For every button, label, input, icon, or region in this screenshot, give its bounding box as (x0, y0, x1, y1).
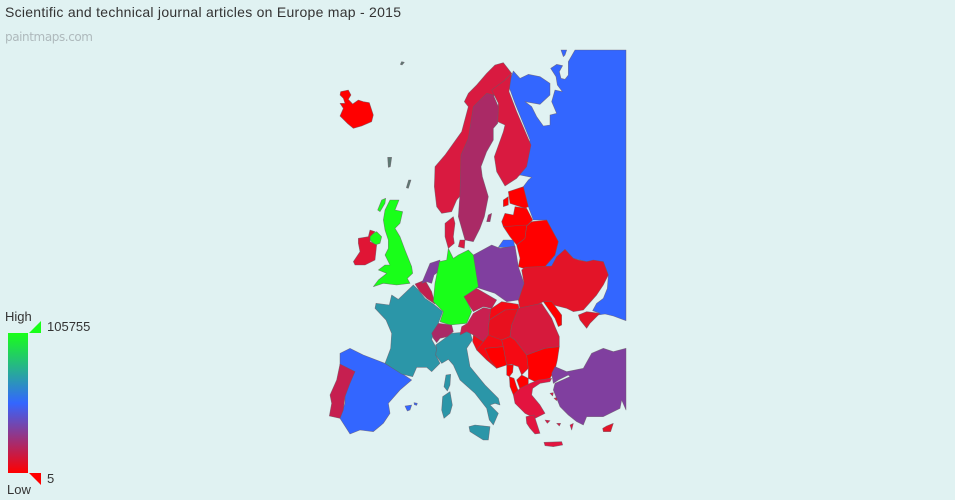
title: Scientific and technical journal articles on Europe map - 2015 (5, 4, 401, 20)
Poland (473, 245, 524, 302)
watermark: paintmaps.com: paintmaps.com (5, 30, 93, 44)
Moldova (543, 302, 562, 327)
Iceland (340, 90, 373, 128)
Czech Republic (464, 288, 497, 312)
Sweden (458, 93, 498, 242)
Germany (433, 248, 478, 325)
Belgium (415, 280, 435, 304)
Russia (498, 50, 626, 321)
Turkey (552, 348, 626, 425)
legend label: Low: Low (7, 482, 31, 497)
Ireland (353, 230, 377, 265)
Denmark (445, 217, 465, 248)
legend label: High: High (5, 309, 32, 324)
France (375, 285, 451, 391)
United Kingdom (373, 198, 413, 287)
Netherlands (422, 260, 440, 283)
Hungary (488, 309, 519, 340)
Bulgaria (527, 347, 559, 382)
Portugal (329, 364, 355, 418)
Lithuania (503, 225, 527, 245)
Bosnia and Herzegovina (485, 347, 507, 368)
Montenegro (507, 365, 513, 377)
legend high marker (29, 321, 41, 333)
Austria (460, 308, 491, 342)
Crete (544, 442, 563, 447)
Cyprus (603, 423, 613, 432)
Crimea (578, 312, 600, 328)
North Macedonia (517, 375, 528, 389)
Albania (509, 377, 520, 395)
legend low marker (29, 473, 41, 485)
Slovenia (473, 335, 485, 350)
Northern Ireland (370, 232, 382, 245)
legend colour bar (8, 333, 28, 473)
Romania (510, 303, 559, 355)
Belarus (517, 220, 558, 268)
Slovakia (489, 302, 519, 320)
map of Europe (329, 50, 626, 447)
legend (5, 309, 90, 497)
Serbia (502, 337, 528, 375)
Finland (492, 73, 531, 186)
Ukraine (518, 249, 608, 312)
Croatia (477, 335, 503, 368)
Greece (513, 378, 573, 434)
Latvia (502, 207, 533, 227)
legend min value: 5 (47, 471, 54, 486)
Estonia (503, 187, 528, 208)
Italy (436, 332, 500, 440)
Spain (340, 348, 417, 434)
Switzerland (432, 323, 453, 343)
northern islands (388, 62, 411, 188)
Norway (434, 63, 512, 213)
legend max value: 105755 (47, 319, 90, 334)
